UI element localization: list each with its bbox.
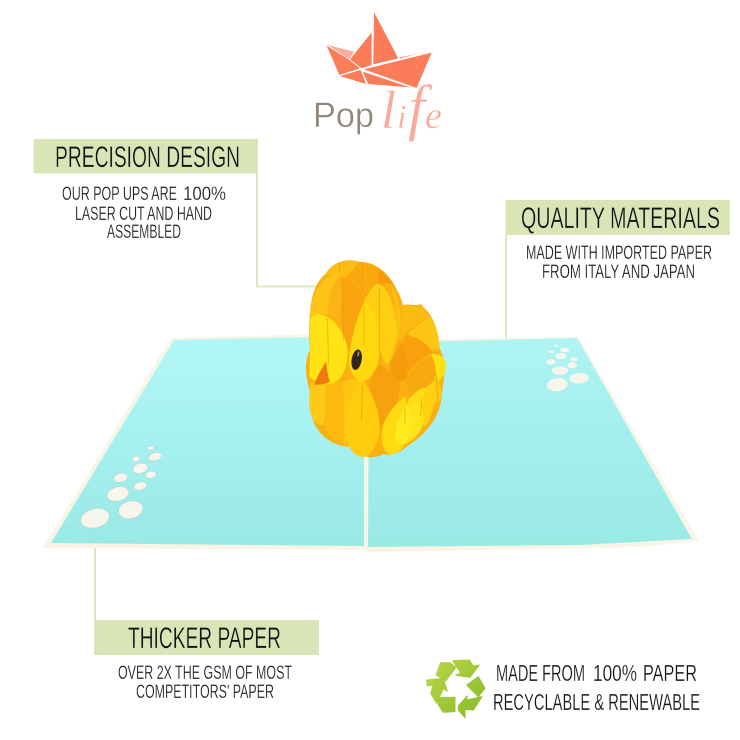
- description: LASER CUT AND HAND: [75, 204, 212, 225]
- recycling text: MADE FROM: [496, 660, 585, 686]
- icon: recycle: [427, 660, 485, 718]
- card fold: [366, 458, 368, 550]
- wordmark: life: f: [408, 74, 433, 142]
- card right panel: [366, 337, 699, 552]
- description: 100%: [183, 184, 226, 205]
- connector: thicker paper: [94, 548, 96, 620]
- callout: quality materials: [506, 200, 730, 283]
- heading: THICKER PAPER: [128, 622, 281, 655]
- card left panel: [43, 333, 366, 550]
- duck silhouette: [306, 260, 446, 457]
- description: [526, 243, 712, 283]
- recycling text: PAPER: [643, 660, 697, 686]
- heading band: [34, 139, 258, 174]
- pop-up rubber duck: [306, 260, 446, 457]
- connector: precision design: [257, 173, 316, 286]
- duck: eye: [350, 349, 363, 371]
- heading: PRECISION DESIGN: [55, 141, 240, 174]
- callout: precision design: [34, 139, 258, 243]
- description: COMPETITORS' PAPER: [136, 682, 274, 703]
- bubbles left: [79, 446, 162, 531]
- description: ASSEMBLED: [107, 222, 181, 243]
- description: [118, 663, 292, 703]
- duck: beak: [314, 362, 330, 385]
- connector: quality materials: [505, 235, 507, 342]
- description: OUR POP UPS ARE: [62, 184, 177, 205]
- description: OVER 2X THE GSM OF MOST: [118, 663, 292, 684]
- wordmark: Pop: Pop: [313, 96, 374, 135]
- callout: thicker paper: [94, 620, 319, 703]
- recycling text: 100%: [593, 660, 637, 686]
- bubbles right: [546, 345, 589, 392]
- wordmark: life: l: [381, 80, 396, 140]
- pop-up card: [43, 333, 699, 552]
- duck: back of head: [310, 261, 401, 365]
- duck: lower body: [309, 365, 424, 457]
- description: [62, 184, 226, 243]
- wordmark: life: e: [425, 95, 442, 137]
- heading band: [506, 200, 730, 235]
- icon: origami boat: [327, 12, 432, 88]
- duck: front of face: [309, 300, 380, 385]
- duck: tail and wing: [390, 304, 446, 437]
- recycling text: [493, 660, 700, 715]
- wordmark: life: i: [397, 99, 406, 136]
- logo: Poplife: [313, 12, 442, 142]
- heading band: [94, 620, 319, 655]
- recycling badge: [427, 660, 700, 718]
